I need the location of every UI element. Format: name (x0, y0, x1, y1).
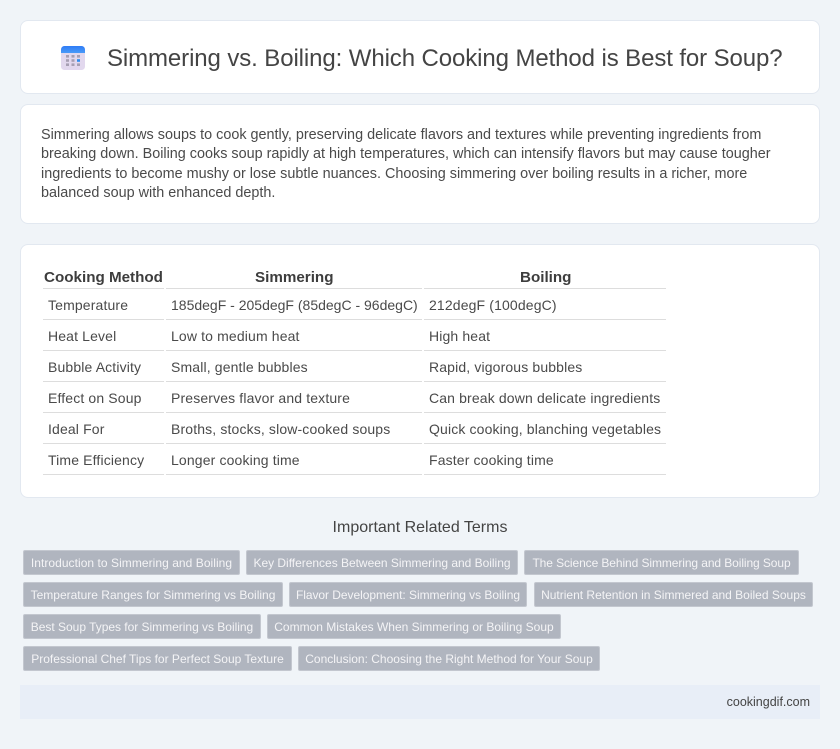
tag (23, 550, 240, 575)
tag: Professional Chef Tips for Perfect Soup Texture (31, 652, 284, 666)
row: ideal for: Quick cooking, blanching vegetables (429, 421, 661, 437)
table header row: Boiling (520, 269, 571, 286)
table header row: Cooking Method (44, 269, 163, 286)
intro paragraph: breaking down. Boiling cooks soup rapidly at high temperatures, which can intensify flavors but may cause tougher (41, 146, 771, 162)
tag: Temperature Ranges for Simmering vs Boiling (31, 588, 275, 602)
intro paragraph: Simmering allows soups to cook gently, preserving delicate flavors and textures while preventing ingredients from (41, 127, 761, 143)
table header row (44, 269, 571, 286)
tag: Introduction to Simmering and Boiling (31, 556, 232, 570)
tag (534, 582, 813, 607)
intro paragraph: ingredients to become mushy or lose subtle nuances. Choosing simmering over boiling results in a richer, more (41, 166, 747, 182)
tag (23, 614, 261, 639)
row: heat level (48, 328, 490, 344)
tag: Best Soup Types for Simmering vs Boiling (31, 620, 253, 634)
row: temperature: 185degF - 205degF (85degC - 96degC) (171, 297, 418, 313)
row: time efficiency: Faster cooking time (429, 452, 554, 468)
row: temperature: Temperature (48, 297, 128, 313)
row: bubble activity: Small, gentle bubbles (171, 359, 308, 375)
tag (524, 550, 799, 575)
tag: Nutrient Retention in Simmered and Boiled Soups (541, 588, 806, 602)
tag: Conclusion: Choosing the Right Method for Your Soup (305, 652, 593, 666)
row: bubble activity: Rapid, vigorous bubbles (429, 359, 582, 375)
row: temperature: 212degF (100degC) (429, 297, 557, 313)
table header row: Simmering (255, 269, 334, 286)
row: heat level: Heat Level (48, 328, 116, 344)
row: heat level: Low to medium heat (171, 328, 300, 344)
tag: Flavor Development: Simmering vs Boiling (296, 588, 520, 602)
intro paragraph: balanced soup with enhanced depth. (41, 185, 275, 201)
row: temperature (48, 297, 557, 313)
row: effect on soup: Preserves flavor and texture (171, 390, 350, 406)
icon: calendar (61, 46, 85, 70)
row: time efficiency (48, 452, 554, 468)
panel: comparison table (20, 244, 820, 498)
tag (23, 646, 292, 671)
tag (267, 614, 561, 639)
panel: introduction text (20, 104, 820, 224)
intro paragraph (41, 127, 771, 201)
tag: Common Mistakes When Simmering or Boiling Soup (274, 620, 554, 634)
row: effect on soup: Can break down delicate ingredients (429, 390, 660, 406)
panel: related term tags (23, 550, 813, 671)
header panel (20, 20, 820, 94)
row: time efficiency: Longer cooking time (171, 452, 300, 468)
title: Simmering vs. Boiling: Which Cooking Method is Best for Soup? (107, 45, 783, 72)
tag (246, 550, 518, 575)
tag: Key Differences Between Simmering and Boiling (253, 556, 510, 570)
heading: related terms: Important Related Terms (333, 519, 507, 536)
row: ideal for: Ideal For (48, 421, 105, 437)
row: ideal for (48, 421, 661, 437)
footer bar (20, 685, 820, 719)
footer credit: cookingdif.com (727, 695, 810, 709)
row: bubble activity: Bubble Activity (48, 359, 141, 375)
row: time efficiency: Time Efficiency (48, 452, 144, 468)
tag (298, 646, 600, 671)
row: effect on soup (48, 390, 660, 406)
row: bubble activity (48, 359, 582, 375)
tag (23, 582, 283, 607)
row: effect on soup: Effect on Soup (48, 390, 142, 406)
row: ideal for: Broths, stocks, slow-cooked soups (171, 421, 390, 437)
tag (289, 582, 527, 607)
tag: The Science Behind Simmering and Boiling Soup (532, 556, 791, 570)
row: heat level: High heat (429, 328, 490, 344)
